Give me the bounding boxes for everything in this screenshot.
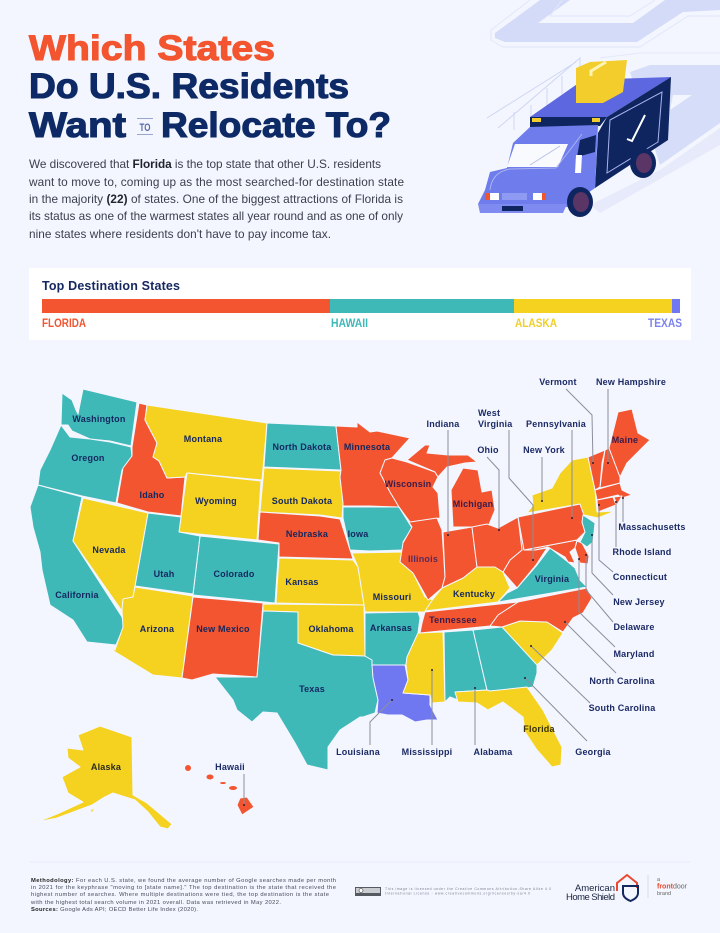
- callout: Connecticut: Connecticut: [613, 572, 667, 582]
- state: Kentucky: [425, 567, 510, 611]
- state: Nevada: Nevada: [92, 545, 126, 555]
- state: Arkansas: Arkansas: [370, 623, 412, 633]
- methodology text: Sources: Google Ads API; OECD Better Life Index (2020).: [31, 907, 198, 913]
- state: Vermont: [588, 450, 605, 490]
- state: New Mexico: New Mexico: [196, 624, 250, 634]
- state: Kentucky: Kentucky: [453, 589, 495, 599]
- methodology text: with the highest total search volume in 2021 overall. Data was retrieved in May 2022.: [30, 900, 281, 906]
- callout: Massachusetts: [618, 497, 686, 532]
- methodology text: highest number of searches. Where multiple destinations were tied, the top destination is the state: [31, 892, 329, 898]
- callout: Maryland: Maryland: [613, 649, 655, 659]
- state: Maine: [609, 409, 650, 477]
- callout: New Hampshire: [596, 377, 666, 464]
- state: Delaware peninsula: [575, 541, 589, 564]
- state: Wyoming: [179, 473, 261, 540]
- license badge and note: [355, 887, 551, 896]
- methodology text: Methodology: For each U.S. state, we found the average number of Google searches made per month: [31, 878, 336, 884]
- map of U.S. states: [30, 389, 650, 829]
- state: Indiana: [442, 527, 477, 588]
- callout: South Carolina: South Carolina: [589, 703, 656, 713]
- state: Colorado: Colorado: [213, 569, 255, 579]
- state: Utah: [135, 513, 200, 594]
- state: Pennsylvania: [518, 504, 585, 550]
- state: Mississippi: [403, 632, 445, 703]
- callout: Rhode Island: [613, 501, 671, 557]
- state: Tennessee: [420, 602, 518, 633]
- callout: Massachusetts: Massachusetts: [618, 522, 686, 532]
- state: Oregon: [38, 425, 132, 503]
- state: Michigan: [407, 445, 495, 527]
- methodology text: [30, 878, 336, 913]
- bar labels: ALASKA: [515, 318, 557, 330]
- state: Nevada: [73, 498, 148, 611]
- logo: American Home Shield: American: [575, 883, 615, 894]
- divider: [30, 861, 690, 863]
- callout: Indiana: Indiana: [427, 419, 460, 429]
- state: Oklahoma: [263, 604, 365, 656]
- state: South Carolina: [502, 621, 563, 665]
- state: Montana: [145, 405, 267, 480]
- callout: New Jersey: [591, 534, 665, 607]
- callout: West Virginia: [478, 408, 534, 561]
- state: Oklahoma: Oklahoma: [308, 624, 354, 634]
- state: California: California: [55, 590, 100, 600]
- callout: Hawaii: [215, 762, 245, 806]
- title: Relocate To?: [161, 106, 391, 145]
- callout: Vermont: Vermont: [539, 377, 577, 387]
- intro text block: [28, 157, 404, 241]
- logo: American Home Shield: [566, 875, 648, 903]
- callout: West Virginia: West: [478, 408, 500, 418]
- callout: Rhode Island: Rhode Island: [613, 547, 671, 557]
- license badge and note: This image is licensed under the Creative Commons Attribution-Share Alike 4.0: [385, 887, 551, 891]
- state: Texas: [215, 611, 378, 770]
- bar labels: FLORIDA: [42, 318, 86, 330]
- callout: Louisiana: Louisiana: [336, 747, 381, 757]
- intro text block: want to move to, coming up as the most searched-for destination state: [28, 175, 404, 189]
- callout: Ohio: [477, 445, 500, 531]
- state: Minnesota: Minnesota: [344, 442, 391, 452]
- callout: New Hampshire: New Hampshire: [596, 377, 666, 387]
- callout: Georgia: [524, 677, 611, 757]
- intro text block: in the majority (22) of states. One of the biggest attractions of Florida is: [29, 192, 403, 206]
- callout: Pennsylvania: Pennsylvania: [526, 419, 587, 429]
- state: North Carolina: [490, 588, 592, 632]
- logo: American Home Shield: Home Shield: [566, 892, 615, 903]
- state: Alaska: [37, 726, 172, 829]
- intro text block: We discovered that Florida is the top state that other U.S. residents: [29, 157, 381, 171]
- state: Colorado: [193, 536, 279, 603]
- callout: Ohio: Ohio: [477, 445, 499, 455]
- callout: Louisiana: [336, 699, 393, 757]
- callout: West Virginia: Virginia: [478, 419, 513, 429]
- bar labels: [42, 318, 682, 330]
- state: Wisconsin: [380, 458, 440, 523]
- state: South Dakota: [260, 468, 343, 518]
- state: Kansas: Kansas: [285, 577, 319, 587]
- callout: New York: New York: [523, 445, 566, 455]
- state: Rhode Island: [614, 496, 622, 505]
- callout: Maryland: [578, 558, 655, 659]
- state: Washington: Washington: [72, 414, 126, 424]
- title: Want: [29, 106, 126, 145]
- state: Idaho: [117, 403, 185, 516]
- state: Georgia: [473, 627, 537, 691]
- state: Montana: Montana: [184, 434, 223, 444]
- state: New Jersey: [580, 515, 595, 547]
- state: Missouri: [352, 552, 433, 612]
- state: Texas: Texas: [299, 684, 325, 694]
- callout: New York: [523, 445, 566, 502]
- background road shapes: [491, 0, 720, 213]
- state: Washington: [61, 389, 137, 446]
- state: Michigan: Michigan: [453, 499, 493, 509]
- state: Idaho: Idaho: [140, 490, 165, 500]
- state: South Dakota: South Dakota: [272, 496, 333, 506]
- state: Tennessee: Tennessee: [429, 615, 477, 625]
- logo: frontdoor brand: [657, 877, 688, 897]
- panel: top destination states: [29, 268, 691, 340]
- state: Ohio: [472, 517, 522, 572]
- state: Hawaii islands: [185, 765, 254, 815]
- state: Louisiana: [372, 665, 438, 722]
- state: Florida: Florida: [523, 724, 555, 734]
- icon: delivery truck: [478, 58, 671, 217]
- state: Maine: Maine: [612, 435, 638, 445]
- callout: Vermont: [539, 377, 594, 464]
- bar labels: HAWAII: [331, 318, 368, 330]
- title: Do U.S. Residents: [29, 67, 349, 106]
- state: Virginia: [498, 548, 587, 602]
- callout: South Carolina: [530, 645, 656, 713]
- callout: North Carolina: [564, 621, 655, 686]
- callout: Alabama: Alabama: [474, 747, 513, 757]
- state: New Hampshire: [600, 448, 620, 488]
- callout: Indiana: [427, 419, 460, 536]
- methodology text: in 2021 for the keyphrase "moving to [state name]." The top destination is the state that received the: [31, 885, 336, 891]
- state: Wyoming: Wyoming: [195, 496, 237, 506]
- state: Wisconsin: Wisconsin: [385, 479, 431, 489]
- callout: Pennsylvania: [526, 419, 587, 519]
- state: Minnesota: [336, 422, 410, 507]
- state: Arkansas: [365, 612, 420, 665]
- state: Connecticut: [597, 497, 616, 512]
- callout: Delaware: [585, 554, 655, 632]
- intro text block: its status as one of the warmest states all year round and as one of only: [29, 209, 403, 223]
- callouts with leader lines: [215, 377, 686, 806]
- state: Maryland: [524, 540, 577, 563]
- bar labels: TEXAS: [648, 318, 682, 330]
- state: Alaska: Alaska: [91, 762, 122, 772]
- license badge and note: International License - www.creativecommons.org/licenses/by-sa/4.0: [385, 892, 530, 896]
- state: New Mexico: [182, 597, 263, 680]
- state: Florida: [455, 687, 562, 767]
- state: Virginia: Virginia: [535, 574, 570, 584]
- state: North Dakota: North Dakota: [273, 442, 332, 452]
- callout: Alabama: [474, 687, 513, 757]
- intro text block: nine states where residents don't have to pay income tax.: [29, 227, 331, 241]
- callout: Delaware: Delaware: [613, 622, 655, 632]
- state: Kansas: [276, 558, 364, 605]
- callout: Connecticut: [598, 504, 667, 582]
- callout: North Carolina: North Carolina: [589, 676, 655, 686]
- title: Which States: [29, 29, 275, 68]
- state: Illinois: [399, 507, 445, 600]
- state: Illinois: Illinois: [408, 554, 438, 564]
- state: Massachusetts: [595, 483, 632, 500]
- title: [29, 29, 391, 145]
- callout: Hawaii: Hawaii: [215, 762, 245, 772]
- state: Nebraska: Nebraska: [286, 529, 329, 539]
- heading: top destination states: Top Destination States: [42, 279, 180, 293]
- callout: Mississippi: Mississippi: [402, 747, 452, 757]
- stacked bar: [42, 299, 680, 313]
- logo: frontdoor brand: brand: [657, 891, 671, 897]
- callout: Georgia: Georgia: [575, 747, 611, 757]
- callout: New Jersey: New Jersey: [613, 597, 665, 607]
- state: Oregon: Oregon: [71, 453, 105, 463]
- state: California: [30, 485, 124, 645]
- state: Iowa: [343, 507, 412, 551]
- logo: frontdoor brand: a: [657, 877, 661, 883]
- state: Nebraska: [258, 512, 353, 559]
- callout: Mississippi: [402, 669, 452, 757]
- state: Missouri: Missouri: [373, 592, 411, 602]
- state: West Virginia: [503, 517, 547, 588]
- state: North Dakota: [264, 423, 341, 470]
- state: Utah: Utah: [154, 569, 174, 579]
- title: TO: [140, 122, 151, 134]
- state: Arizona: [112, 587, 193, 678]
- state: New York: [527, 457, 615, 518]
- state: Alabama: [444, 630, 487, 702]
- logo: frontdoor brand: frontdoor: [657, 884, 688, 890]
- state: Arizona: Arizona: [140, 624, 175, 634]
- state: Iowa: Iowa: [348, 529, 369, 539]
